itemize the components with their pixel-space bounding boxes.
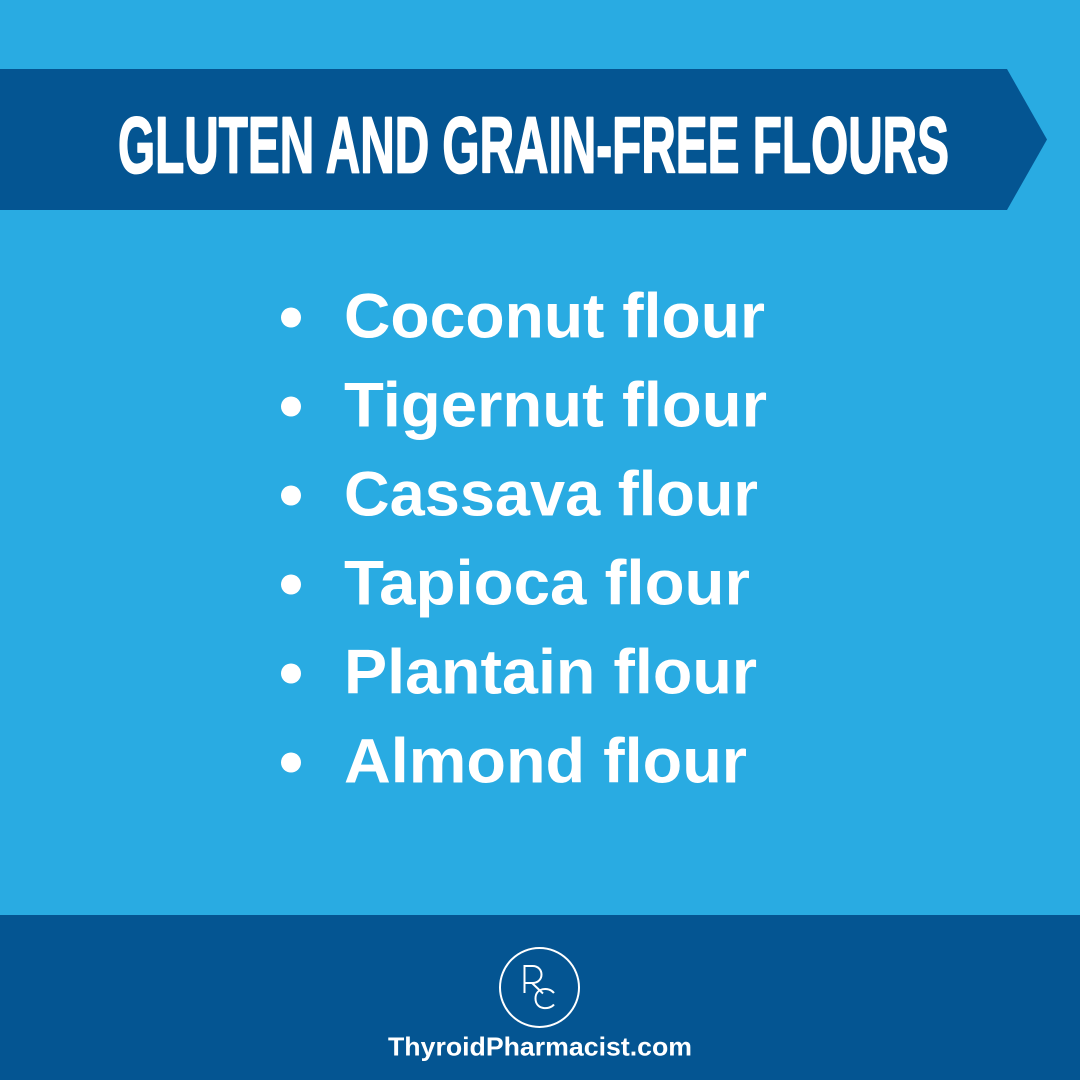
- list item: cassava flour: Cassava flour: [344, 460, 758, 530]
- title banner: [0, 69, 1047, 210]
- list item: coconut flour: Coconut flour: [344, 282, 765, 352]
- website: ThyroidPharmacist.com: [388, 1032, 692, 1062]
- list item: tapioca flour: Tapioca flour: [344, 548, 750, 618]
- list item: tigernut flour: Tigernut flour: [344, 370, 767, 440]
- list item: almond flour: Almond flour: [344, 726, 747, 796]
- flour list: [281, 282, 767, 796]
- footer band: [0, 915, 1080, 1080]
- list item: plantain flour: Plantain flour: [344, 638, 757, 708]
- icon: RC logo: [500, 948, 579, 1027]
